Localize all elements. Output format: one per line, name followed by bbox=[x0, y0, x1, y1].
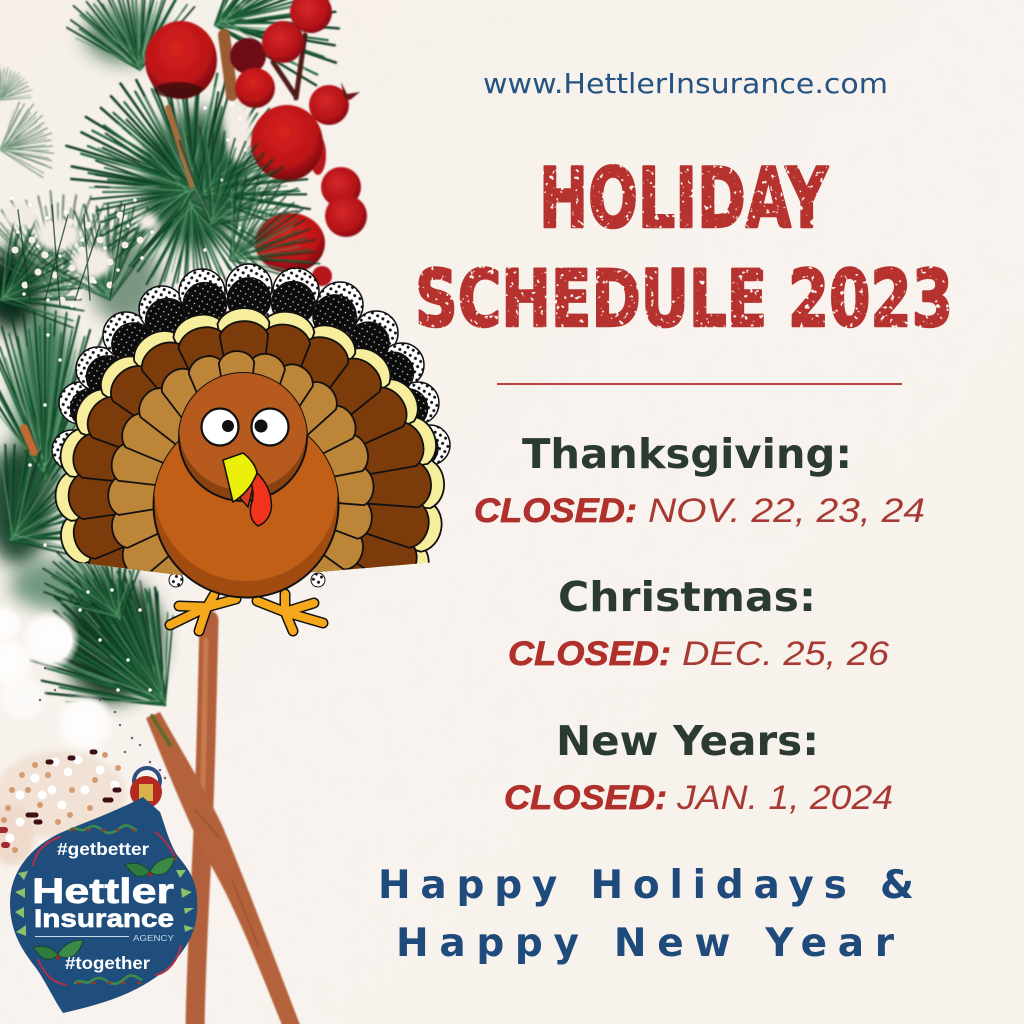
turkey bbox=[52, 264, 450, 680]
divider bbox=[497, 383, 902, 385]
icon: turkey feet bbox=[170, 594, 323, 631]
agency line bbox=[35, 933, 175, 943]
schedule: Christmas bbox=[508, 573, 889, 673]
icon: beak bbox=[223, 453, 257, 502]
logo: Hettler Insurance ornament bbox=[10, 768, 197, 1013]
tail fan bbox=[51, 263, 451, 575]
small lace tips below tail bbox=[169, 573, 325, 587]
black inner feathers bbox=[70, 277, 439, 575]
hashtag top: #getbetter bbox=[57, 839, 149, 859]
tan feathers bbox=[107, 350, 374, 575]
twigs and dark berry stems bbox=[24, 35, 305, 452]
schedule: New Years bbox=[504, 717, 893, 817]
icon: holly top bbox=[125, 857, 175, 876]
hashtag bottom: #together bbox=[65, 953, 150, 973]
closing greeting bbox=[378, 863, 914, 966]
icon: eyes bbox=[202, 408, 288, 446]
agency line: AGENCY bbox=[133, 933, 175, 943]
pine sprays: soft foliage masses bbox=[0, 0, 363, 759]
schedule: Christmas: DEC. 25, 26 bbox=[682, 635, 889, 673]
turkey body bbox=[152, 436, 340, 598]
title: HOLIDAY bbox=[539, 150, 829, 247]
branch: two wrapped cinnamon stems bbox=[146, 620, 302, 1024]
brand name: Insurance bbox=[34, 905, 174, 933]
ornament body bbox=[10, 797, 197, 1013]
white pom-poms bbox=[0, 605, 116, 755]
snowy pinecone bbox=[0, 668, 165, 865]
schedule: Christmas: Christmas: bbox=[558, 573, 816, 621]
title bbox=[415, 150, 953, 345]
ornament tree dots bbox=[15, 870, 194, 936]
closing greeting: Happy New Year bbox=[396, 921, 895, 966]
pale yellow feather tips bbox=[54, 307, 445, 575]
ornament garlands bbox=[70, 825, 141, 986]
schedule: Thanksgiving: CLOSED: bbox=[474, 492, 637, 530]
ornament cap bbox=[130, 768, 162, 808]
ornament ribbons bbox=[33, 832, 181, 985]
icon: holly bottom bbox=[33, 940, 83, 960]
schedule: New Years: JAN. 1, 2024 bbox=[676, 779, 893, 817]
brand name bbox=[32, 872, 174, 933]
dark brown feathers bbox=[68, 320, 432, 575]
schedule: Thanksgiving: Thanksgiving: bbox=[522, 430, 852, 478]
snow on pine needles bbox=[4, 96, 280, 690]
schedule: New Years: New Years: bbox=[556, 717, 819, 765]
needles over apple bbox=[151, 110, 339, 313]
turkey head bbox=[179, 366, 307, 501]
schedule: New Years: CLOSED: bbox=[504, 779, 667, 817]
schedule: Thanksgiving bbox=[474, 430, 925, 530]
brand name: Hettler bbox=[32, 872, 174, 911]
lace outer feathers bbox=[51, 263, 451, 574]
red apples and berries bbox=[145, 0, 367, 286]
schedule: Thanksgiving: NOV. 22, 23, 24 bbox=[648, 492, 925, 530]
icon: wattle bbox=[240, 470, 271, 526]
website url: www.HettlerInsurance.com bbox=[483, 67, 888, 100]
closing greeting: Happy Holidays & bbox=[378, 863, 914, 908]
schedule: Christmas: CLOSED: bbox=[508, 635, 671, 673]
